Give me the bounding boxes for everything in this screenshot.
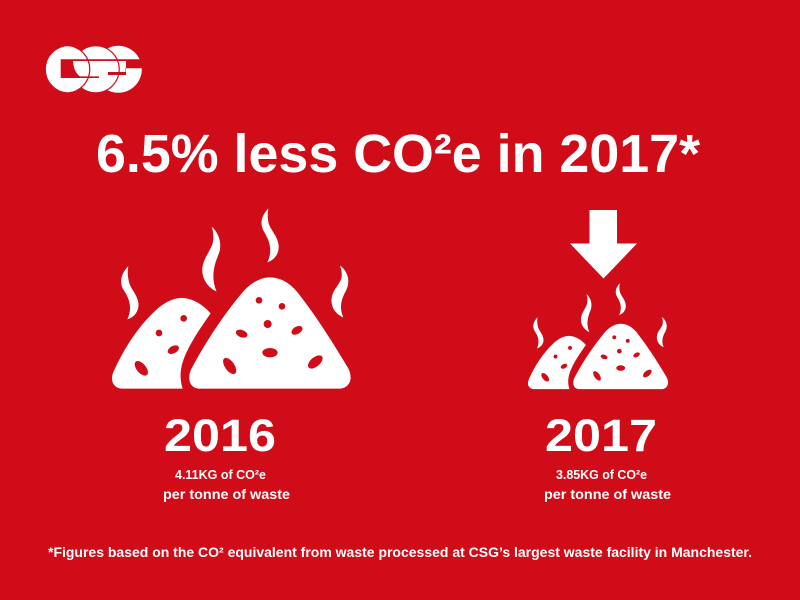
text block: 2016: per tonne of waste (163, 487, 291, 502)
text block: 2016: 4.11KG of CO²e (175, 467, 266, 482)
icon: small waste piles with fumes (528, 283, 668, 389)
text block: 2017: per tonne of waste (544, 487, 672, 502)
logo: CSG (45, 46, 143, 93)
arrow: down (570, 210, 637, 278)
footnote: *Figures based on the CO² equivalent from waste processed at CSG’s largest waste facility in Manchester. (48, 545, 752, 560)
text block: 2016 (163, 410, 291, 502)
text block: 2017 (544, 410, 672, 502)
text block: 2017: 3.85KG of CO²e (556, 467, 647, 482)
icon: large waste piles with fumes (112, 208, 351, 389)
text block: 2016: 2016 (164, 410, 276, 461)
title: 6.5% less CO²e in 2017* (96, 124, 700, 184)
text block: 2017: 2017 (545, 410, 657, 461)
